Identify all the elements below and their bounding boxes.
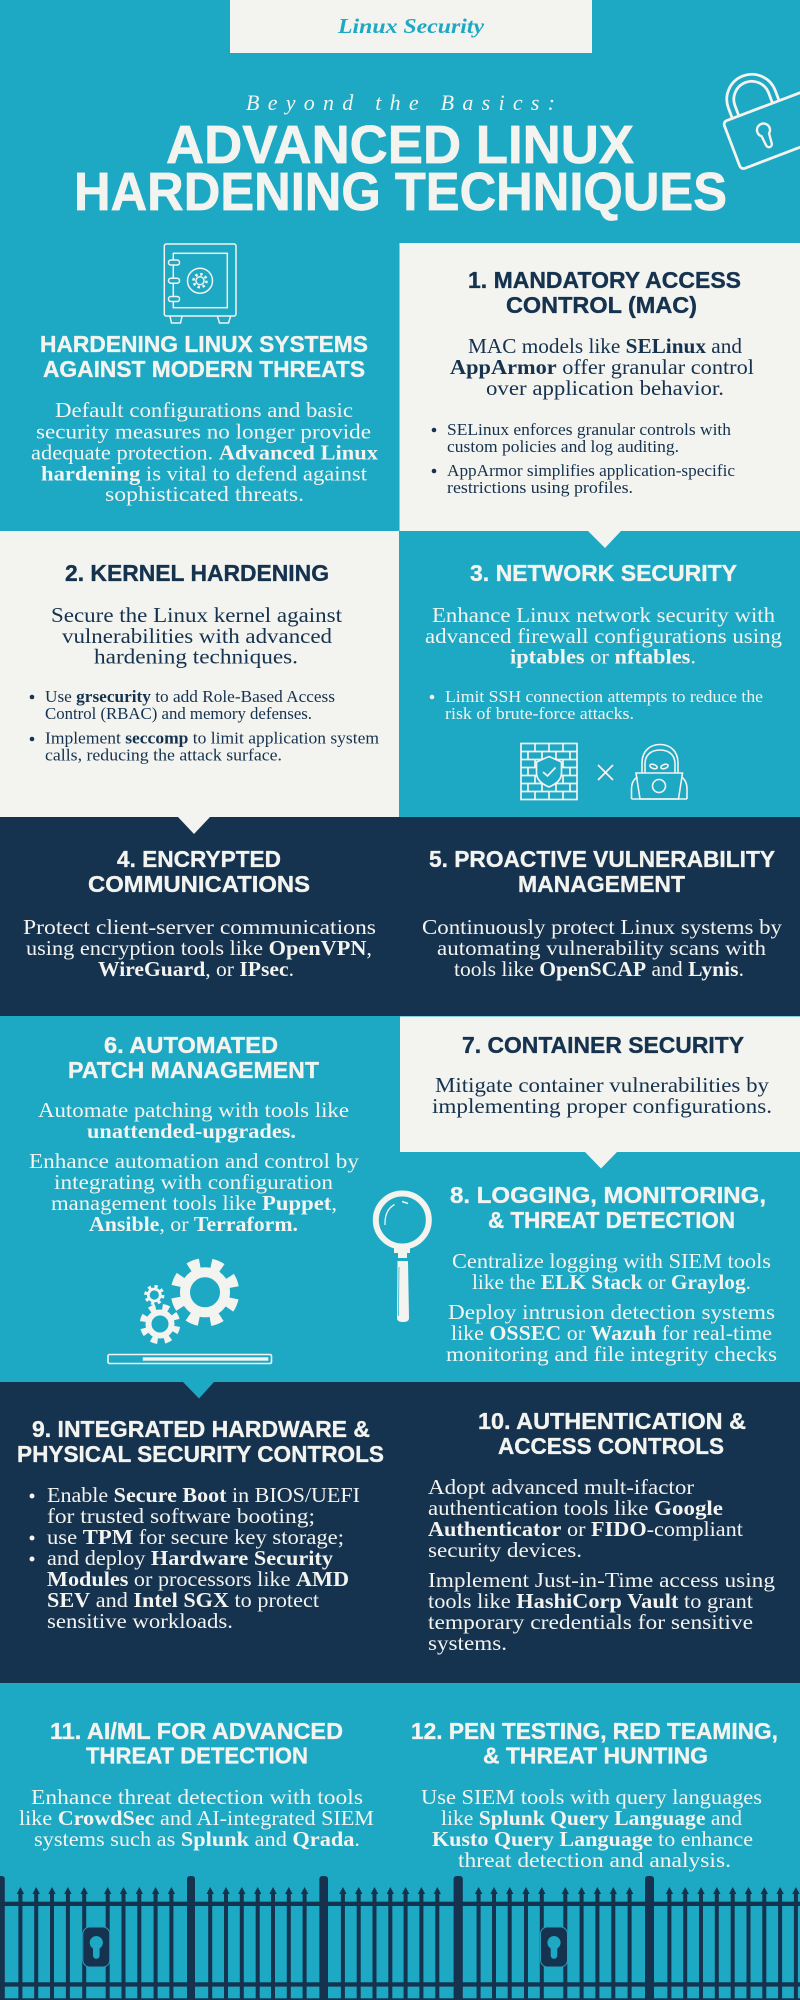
text block: Secure the Linux kernel against xyxy=(51,603,342,627)
heading: 11. AI/ML FOR ADVANCED xyxy=(50,1718,343,1744)
title block xyxy=(74,90,727,222)
panel: 1 mandatory access control xyxy=(400,243,800,531)
text block: systems. xyxy=(428,1631,507,1655)
bullet list: Implement seccomp to limit application system xyxy=(45,728,379,748)
text block: security measures no longer provide xyxy=(36,420,371,444)
bullet list xyxy=(30,1483,360,1633)
text block: systems such as Splunk and Qrada. xyxy=(34,1827,360,1851)
text block: Enhance automation and control by xyxy=(29,1149,360,1173)
text block: sophisticated threats. xyxy=(105,482,304,506)
text block: Authenticator or FIDO-compliant xyxy=(428,1517,743,1541)
panel: 4 encrypted communications xyxy=(0,817,400,1016)
heading: CONTROL (MAC) xyxy=(506,292,697,318)
panel: 12 pen testing red teaming threat hunting xyxy=(411,1718,778,1872)
text block: iptables or nftables. xyxy=(510,644,696,668)
heading xyxy=(468,267,741,318)
main title: ADVANCED LINUX xyxy=(166,116,634,175)
gate lock: left xyxy=(83,1927,110,1967)
text block xyxy=(432,1073,772,1118)
icon: firewall xyxy=(521,744,577,800)
text block: Automate patching with tools like xyxy=(38,1098,349,1122)
bullet list: Limit SSH connection attempts to reduce the xyxy=(445,687,763,706)
text block: Implement Just-in-Time access using xyxy=(428,1568,776,1592)
bullet list: AppArmor simplifies application-specific xyxy=(447,461,735,480)
text block xyxy=(51,603,342,668)
text block: adequate protection. Advanced Linux xyxy=(31,440,379,464)
heading xyxy=(478,1408,746,1459)
text block: like the ELK Stack or Graylog. xyxy=(472,1270,751,1294)
text block: Kusto Query Language to enhance xyxy=(432,1827,753,1851)
text block: monitoring and file integrity checks xyxy=(446,1342,777,1366)
bullet list: use TPM for secure key storage; xyxy=(47,1525,344,1549)
bullet list: risk of brute-force attacks. xyxy=(445,704,634,723)
heading: 4. ENCRYPTED xyxy=(117,846,281,872)
text block xyxy=(428,1475,776,1655)
text block: integrating with configuration xyxy=(54,1170,334,1194)
text block: Adopt advanced mult-ifactor xyxy=(428,1475,694,1499)
text block: security devices. xyxy=(428,1538,582,1562)
bullet list xyxy=(30,687,379,764)
heading: MANAGEMENT xyxy=(518,871,686,897)
bullet list: for trusted software booting; xyxy=(47,1504,315,1528)
bullet list: Use grsecurity to add Role-Based Access xyxy=(45,687,335,706)
panel: 9 hardware and physical security xyxy=(0,1382,400,1683)
heading: 3. NETWORK SECURITY xyxy=(470,560,737,586)
panel: 7 container security xyxy=(400,1016,800,1168)
text block xyxy=(23,915,376,981)
panel: 5 proactive vulnerability management xyxy=(400,817,800,1016)
bullet list: Enable Secure Boot in BIOS/UEFI xyxy=(47,1483,360,1507)
pointer xyxy=(585,1152,617,1168)
progress bar xyxy=(108,1354,272,1364)
text block xyxy=(19,1785,374,1851)
heading xyxy=(17,1416,384,1467)
text block: implementing proper configurations. xyxy=(432,1094,772,1118)
icon: hacker xyxy=(632,744,687,799)
text block: Protect client-server communications xyxy=(23,915,376,939)
text block: vulnerabilities with advanced xyxy=(62,624,333,648)
text block: unattended-upgrades. xyxy=(87,1119,296,1143)
text block: Continuously protect Linux systems by xyxy=(422,915,783,939)
text block: using encryption tools like OpenVPN , xyxy=(26,936,372,960)
text block: Ansible, or Terraform. xyxy=(89,1212,298,1236)
text block: tools like HashiCorp Vault to grant xyxy=(428,1589,753,1613)
text block: Mitigate container vulnerabilities by xyxy=(435,1073,770,1097)
bullet list: Modules or processors like AMD xyxy=(47,1567,349,1591)
pointer xyxy=(178,817,210,834)
text block xyxy=(422,915,783,981)
pointer xyxy=(588,531,621,548)
text block: tools like OpenSCAP and Lynis. xyxy=(454,957,744,981)
heading xyxy=(429,846,775,897)
text block: Centralize logging with SIEM tools xyxy=(452,1249,771,1273)
bullet list: sensitive workloads. xyxy=(47,1609,233,1633)
bullet list: custom policies and log auditing. xyxy=(447,437,679,456)
heading: & THREAT DETECTION xyxy=(488,1207,735,1233)
icon: gears xyxy=(141,1257,240,1343)
text block xyxy=(29,1098,360,1236)
heading: 1. MANDATORY ACCESS xyxy=(468,267,741,293)
heading: 7. CONTAINER SECURITY xyxy=(462,1032,744,1058)
heading: 8. LOGGING, MONITORING, xyxy=(450,1182,766,1208)
text block xyxy=(425,603,783,668)
text block: authentication tools like Google xyxy=(428,1496,723,1520)
subtitle: Beyond the Basics: xyxy=(246,90,555,115)
bullet list: SEV and Intel SGX to protect xyxy=(47,1588,319,1612)
heading: & THREAT HUNTING xyxy=(483,1742,708,1768)
bullet list: SELinux enforces granular controls with xyxy=(447,420,732,439)
panel: intro xyxy=(31,244,379,506)
heading: 2. KERNEL HARDENING xyxy=(65,560,329,586)
heading: 9. INTEGRATED HARDWARE & xyxy=(32,1416,370,1442)
text block: MAC models like SELinux and xyxy=(468,334,742,358)
header tab xyxy=(230,0,592,53)
bullet list xyxy=(430,687,763,723)
text block: hardening techniques. xyxy=(94,644,298,668)
text block: threat detection and analysis. xyxy=(458,1848,731,1872)
heading: HARDENING LINUX SYSTEMS xyxy=(40,331,368,357)
text block: hardening is vital to defend against xyxy=(41,462,367,486)
pointer xyxy=(183,1382,214,1398)
heading: 10. AUTHENTICATION & xyxy=(478,1408,746,1434)
text block: like OSSEC or Wazuh for real-time xyxy=(451,1321,772,1345)
heading: 5. PROACTIVE VULNERABILITY xyxy=(429,846,775,872)
text block: Enhance threat detection with tools xyxy=(31,1785,363,1809)
heading: PHYSICAL SECURITY CONTROLS xyxy=(17,1441,384,1467)
heading xyxy=(68,1032,320,1083)
header tab: Linux Security xyxy=(337,14,485,38)
panel: 2 kernel hardening xyxy=(0,531,399,817)
heading xyxy=(50,1718,343,1768)
icon: magnifier xyxy=(376,1194,429,1322)
panel: 3 network security xyxy=(399,531,800,817)
panel: 8 logging monitoring threat detection xyxy=(446,1182,777,1366)
pointer xyxy=(400,414,411,438)
text block: like Splunk Query Language and xyxy=(441,1806,743,1830)
text block: AppArmor offer granular control xyxy=(450,355,754,379)
text block xyxy=(421,1785,762,1872)
heading: THREAT DETECTION xyxy=(86,1742,308,1768)
panel: 10 authentication and access controls xyxy=(400,1382,800,1683)
heading: AGAINST MODERN THREATS xyxy=(43,356,365,382)
text block: Use SIEM tools with query languages xyxy=(421,1785,762,1809)
heading: ACCESS CONTROLS xyxy=(498,1433,724,1459)
text block: Enhance Linux network security with xyxy=(432,603,776,627)
text block xyxy=(450,334,754,400)
main title: HARDENING TECHNIQUES xyxy=(74,163,727,222)
icon: padlock xyxy=(710,56,800,170)
text block: like CrowdSec and AI-integrated SIEM xyxy=(19,1806,374,1830)
text block xyxy=(446,1249,777,1366)
icon: x xyxy=(598,765,613,780)
gate lock: right xyxy=(540,1927,568,1967)
heading xyxy=(40,331,368,382)
iron fence xyxy=(0,1876,800,2000)
text block: Default configurations and basic xyxy=(55,398,353,422)
heading xyxy=(450,1182,766,1233)
bullet list: and deploy Hardware Security xyxy=(47,1546,334,1570)
main title xyxy=(74,116,727,222)
text block: WireGuard, or IPsec. xyxy=(98,957,294,981)
icon: safe xyxy=(164,244,236,323)
heading: COMMUNICATIONS xyxy=(88,871,310,897)
heading xyxy=(88,846,310,897)
heading xyxy=(411,1718,778,1768)
bullet list: Control (RBAC) and memory defenses. xyxy=(45,704,312,723)
bullet list xyxy=(432,420,735,497)
text block: temporary credentials for sensitive xyxy=(428,1610,753,1634)
bullet list: restrictions using profiles. xyxy=(447,478,633,497)
text block: advanced firewall configurations using xyxy=(425,624,783,648)
text block: over application behavior. xyxy=(486,376,724,400)
text block: management tools like Puppet, xyxy=(51,1191,337,1215)
text block: automating vulnerability scans with xyxy=(437,936,767,960)
text block: Deploy intrusion detection systems xyxy=(448,1300,775,1324)
heading: 12. PEN TESTING, RED TEAMING, xyxy=(411,1718,778,1744)
text block xyxy=(31,398,379,506)
panel: 6 automated patch management xyxy=(29,1032,360,1364)
heading: PATCH MANAGEMENT xyxy=(68,1057,320,1083)
heading: 6. AUTOMATED xyxy=(104,1032,278,1058)
bullet list: calls, reducing the attack surface. xyxy=(45,746,282,764)
panel: 11 ai/ml threat detection xyxy=(19,1718,374,1851)
